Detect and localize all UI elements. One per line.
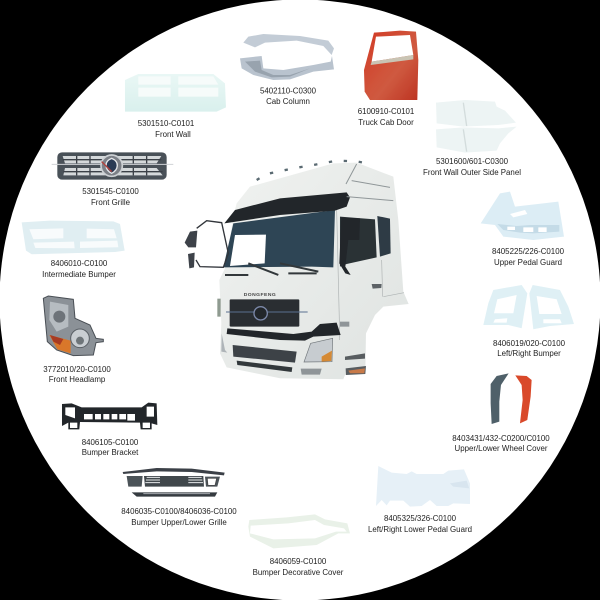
black bumper strip (227, 323, 341, 341)
left mirrors (185, 231, 197, 268)
label: truck cab door: Truck Cab Door (358, 118, 414, 127)
windshield reflection (230, 235, 266, 266)
lower grille (233, 345, 297, 363)
label: bumper decorative cover: Bumper Decorative Cover (253, 568, 344, 577)
label: front wall: Front Wall (155, 130, 191, 139)
label: left/right bumper (493, 339, 566, 358)
label: front wall outer side panel: Front Wall Outer Side Panel (423, 168, 521, 177)
label: bumper upper/lower grille: Bumper Upper/Lower Grille (131, 518, 227, 527)
part: left/right bumper (483, 285, 574, 329)
part: truck cab door (364, 31, 418, 100)
part: front wall (125, 74, 226, 112)
fog lamp (301, 369, 322, 375)
part: front wall outer side panel (436, 100, 517, 153)
label: bumper upper/lower grille: 8406035-C0100/8406036-C0100 (121, 507, 237, 516)
label: upper pedal guard: Upper Pedal Guard (494, 258, 562, 267)
left headlight (221, 333, 227, 353)
part: bumper bracket (62, 403, 157, 429)
part: front grille (52, 152, 173, 180)
label: front grille (82, 187, 139, 207)
door line (337, 210, 404, 340)
part: upper pedal guard (481, 192, 564, 240)
label: front wall (138, 119, 194, 139)
side lights (217, 299, 221, 317)
label: upper pedal guard: 8405225/226-C0100 (492, 247, 565, 256)
label: front grille: Front Grille (91, 198, 131, 207)
label: left/right lower pedal guard: 8405325/326-C0100 (384, 514, 457, 523)
door mirror (339, 217, 360, 275)
label: upper/lower wheel cover (452, 434, 550, 453)
label: left/right bumper: Left/Right Bumper (497, 349, 561, 358)
brand text: DONGFENG (244, 292, 276, 298)
label: intermediate bumper: 8406010-C0100 (51, 259, 108, 268)
label: bumper decorative cover: 8406059-C0100 (270, 557, 327, 566)
label: front wall outer side panel: 5301600/601-C0300 (436, 157, 509, 166)
part: cab column (240, 34, 334, 80)
upper grille (230, 299, 299, 327)
label: left/right lower pedal guard: Left/Right Lower Pedal Guard (368, 525, 472, 534)
part: front headlamp (43, 296, 103, 356)
label: intermediate bumper: Intermediate Bumper (42, 270, 116, 279)
label: cab column: Cab Column (266, 97, 310, 106)
door handle (372, 284, 382, 289)
label: front wall outer side panel (423, 157, 521, 177)
label: cab column (260, 86, 317, 106)
windshield (223, 210, 335, 267)
label: cab column: 5402110-C0300 (260, 86, 317, 96)
sun visor (224, 192, 350, 223)
part: upper/lower wheel cover (491, 373, 532, 424)
label: bumper bracket: 8406105-C0100 (82, 438, 139, 447)
label: front wall: 5301510-C0101 (138, 119, 194, 128)
side windows (340, 217, 377, 267)
part: bumper decorative cover (248, 514, 350, 548)
label: left/right bumper: 8406019/020-C0100 (493, 339, 566, 348)
label: truck cab door (358, 107, 414, 127)
roof line (346, 164, 393, 201)
label: bumper bracket (82, 438, 139, 457)
label: upper/lower wheel cover: Upper/Lower Wheel Cover (455, 444, 548, 453)
label: front grille: 5301545-C0100 (82, 187, 139, 196)
side steps (345, 353, 366, 375)
headlight (304, 338, 333, 362)
label: intermediate bumper (42, 259, 116, 279)
label: front headlamp: Front Headlamp (49, 375, 106, 384)
part: left/right lower pedal guard (376, 466, 470, 507)
label: bumper decorative cover (253, 557, 344, 577)
part: intermediate bumper (22, 221, 125, 254)
roof fittings (257, 161, 373, 180)
label: front headlamp: 3772010/20-C0100 (43, 365, 111, 374)
label: front headlamp (43, 365, 111, 384)
label: upper pedal guard (492, 247, 565, 267)
cab body (219, 163, 409, 379)
truck cab (185, 161, 409, 379)
label: truck cab door: 6100910-C0101 (358, 107, 414, 116)
label: bumper bracket: Bumper Bracket (82, 448, 139, 457)
label: bumper upper/lower grille (121, 507, 237, 527)
label: left/right lower pedal guard (368, 514, 472, 534)
left mirror arm (196, 221, 228, 267)
label: upper/lower wheel cover: 8403431/432-C0200/C0100 (452, 434, 550, 443)
wipers (225, 263, 318, 275)
part: bumper upper/lower grille (123, 468, 225, 497)
